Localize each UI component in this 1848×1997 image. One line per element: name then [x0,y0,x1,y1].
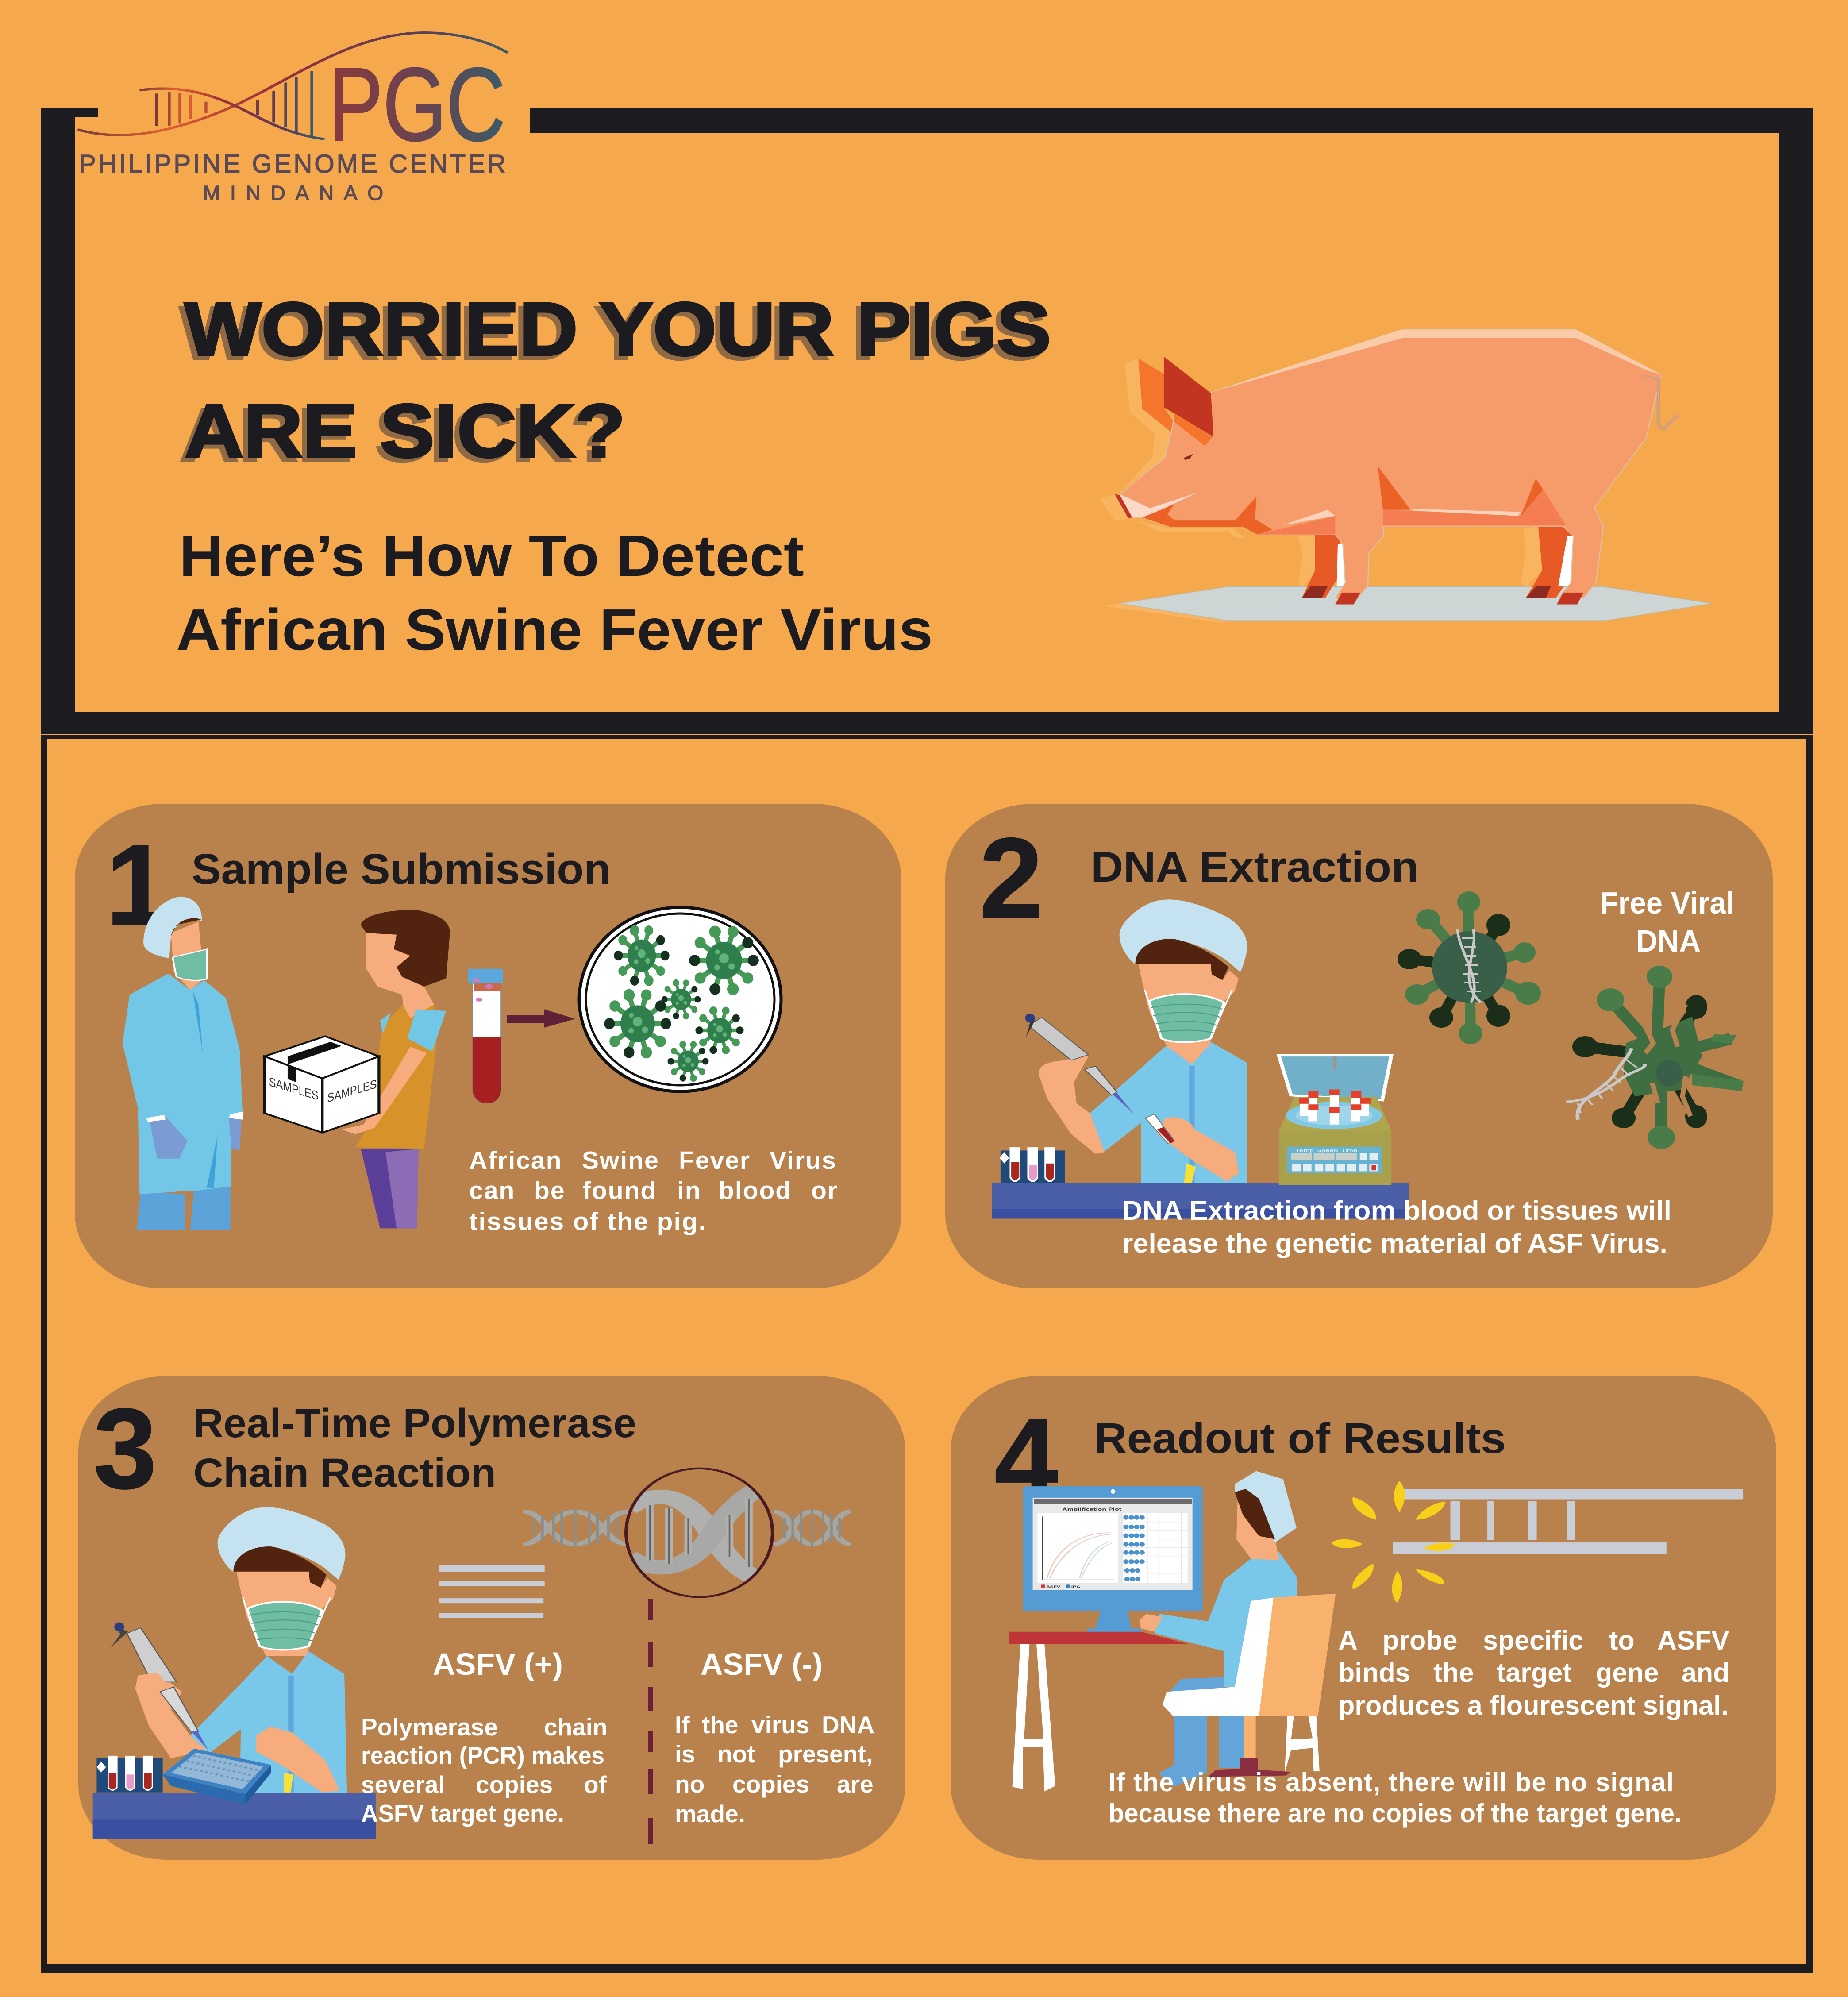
logo wordmark PGC: PGC [328,46,505,162]
probe description: A [1338,1625,1358,1655]
desk [93,1793,376,1839]
label: free viral DNA [1600,886,1734,958]
target gene strands [439,1565,545,1618]
negative description: If [675,1711,690,1739]
DNA magnifier [523,1469,851,1597]
technician body [135,1651,347,1794]
panel 2 description: release the genetic material of ASF Virus. [1122,1228,1667,1258]
negative description: present, [778,1740,873,1768]
panel 1 description: tissues of the pig. [469,1207,707,1236]
header frame [41,108,1813,734]
centrifuge: Time [1341,1148,1358,1153]
tail [1645,376,1679,429]
absence description: If the virus is absent, there will be no signal [1109,1768,1674,1797]
positive description: of [584,1771,607,1798]
pig ghost shadow [1100,359,1542,623]
sample box [265,1036,379,1133]
title text [185,287,1051,473]
seated technician [1140,1471,1336,1787]
probe description: and [1682,1658,1729,1688]
step number 1: 1 [106,821,169,948]
positive description: copies [476,1771,553,1798]
lower frame [41,735,1813,1973]
absence description: because there are no copies of the target gene. [1109,1799,1682,1828]
computer monitor with amplification plot: IPC [1071,1585,1080,1589]
negative description: virus [751,1711,809,1739]
negative description: no [675,1770,705,1798]
person delivering samples [342,910,450,1228]
positive description: ASFV target gene. [361,1800,564,1827]
computer monitor with amplification plot [1023,1486,1203,1632]
logo helix [77,33,508,139]
panel 3: real-time PCR [78,1376,905,1860]
panel 3 background [78,1376,905,1860]
probe description: probe [1382,1625,1457,1655]
centrifuge [1279,1056,1391,1185]
subtitle [176,523,933,662]
panel 1 background [75,804,901,1288]
step number 2: 2 [979,814,1043,942]
negative description: are [837,1770,874,1798]
panel 1 description: or [811,1176,838,1205]
pig illustration [1100,330,1712,623]
title shadow: WORRIED YOUR PIGS [180,291,1046,375]
heading: Real-Time Polymerase [193,1401,636,1446]
intact virus [1398,891,1541,1044]
heading: Readout of Results [1094,1414,1506,1462]
far legs [1301,527,1573,598]
panel 1 description: Virus [770,1146,837,1175]
probe description: gene [1596,1658,1659,1688]
subtitle: Here’s How To Detect [179,523,804,588]
panel 1 description: be [534,1176,566,1205]
title shadow: ARE SICK? [180,393,620,477]
negative description: made. [675,1800,745,1827]
negative description [675,1711,874,1827]
panel 1 description: Swine [582,1146,659,1175]
positive description: Polymerase [361,1713,498,1741]
pipette tip box [163,1749,271,1804]
panel 1: sample submission [75,804,901,1288]
blood tube [468,969,503,1103]
step number 4: 4 [994,1395,1059,1523]
probe description: ASFV [1657,1625,1729,1655]
heading: Chain Reaction [193,1450,496,1496]
panel 1 description [469,1146,838,1236]
pipette and tube [1025,1014,1174,1143]
back highlight [1213,330,1661,392]
panel 1 description: found [582,1176,657,1205]
near feet [1335,593,1583,605]
step number 3: 3 [93,1384,157,1512]
sample box: SAMPLES [327,1077,377,1105]
probe description [1338,1625,1729,1720]
lab technician [123,897,243,1230]
negative label: ASFV (-) [701,1647,823,1681]
label: free viral DNA: Free Viral [1600,886,1734,920]
panel 2: DNA extraction [945,804,1773,1288]
desk [1009,1632,1189,1792]
logo name: PHILIPPINE GENOME CENTER [79,150,506,178]
subtitle: African Swine Fever Virus [176,597,933,662]
probe description: the [1433,1658,1474,1688]
panel 1 description: in [677,1176,701,1205]
heading: Sample Submission [192,845,611,893]
belly shade [1383,490,1566,525]
probe description: to [1609,1625,1635,1655]
title text: WORRIED YOUR PIGS [185,287,1051,371]
desk [992,1183,1409,1218]
negative description: not [717,1740,755,1768]
probe description: produces a flourescent signal. [1338,1690,1729,1720]
centrifuge: Speed [1317,1148,1338,1153]
pipette [110,1622,208,1750]
technician body [1039,1042,1247,1183]
far ear [1138,359,1173,432]
probe description: target [1497,1658,1571,1688]
panel 1 description: African [469,1146,562,1175]
panel 1 description: can [469,1176,515,1205]
chest shade [1258,516,1335,535]
negative description: is [675,1740,695,1768]
absence description [1109,1768,1682,1828]
near ear [1164,357,1213,437]
panel 4 background [951,1376,1776,1860]
heading: DNA Extraction [1091,843,1419,891]
panel 2 description: DNA Extraction from blood or tissues will [1122,1195,1671,1226]
panel 4: readout of results [951,1376,1776,1860]
petri dish with viruses [579,907,781,1091]
sample box: SAMPLES [269,1075,319,1103]
fluorescent signal rays [1331,1481,1455,1603]
negative description: copies [732,1770,809,1798]
computer monitor with amplification plot: Amplification Plot [1062,1507,1122,1511]
technician head [218,1507,345,1656]
ground [1120,587,1712,621]
logo location: MINDANAO [203,181,383,204]
snout [1120,493,1197,517]
arrow [507,1009,575,1028]
probe description: binds [1338,1658,1410,1688]
panel 2 description [1122,1195,1671,1258]
negative description: the [702,1711,738,1739]
logo: Philippine Genome Center Mindanao [77,33,508,204]
broken virus releasing DNA [1566,966,1744,1149]
heading [193,1401,636,1496]
positive description: reaction (PCR) makes [361,1742,604,1769]
probe description: specific [1483,1625,1583,1655]
title text: ARE SICK? [185,389,625,473]
negative description: DNA [822,1711,874,1739]
label: free viral DNA: DNA [1636,924,1701,958]
positive label: ASFV (+) [433,1647,563,1681]
computer monitor with amplification plot: ASFV [1046,1585,1061,1589]
panel 1 description: blood [719,1176,792,1205]
panel 2 background [945,804,1773,1288]
technician head [1120,899,1247,1048]
positive description: several [361,1771,445,1798]
divider [648,1599,653,1844]
title shadow [180,291,1046,477]
tube rack [96,1756,163,1793]
positive description: chain [544,1713,608,1741]
centrifuge: Temp [1295,1148,1314,1153]
eye [1184,454,1194,460]
panel 1 description: Fever [679,1146,751,1175]
tube rack [999,1147,1065,1183]
positive description [361,1713,608,1827]
title [180,287,1051,477]
body [1120,330,1661,598]
probe binding target gene [1393,1489,1743,1554]
